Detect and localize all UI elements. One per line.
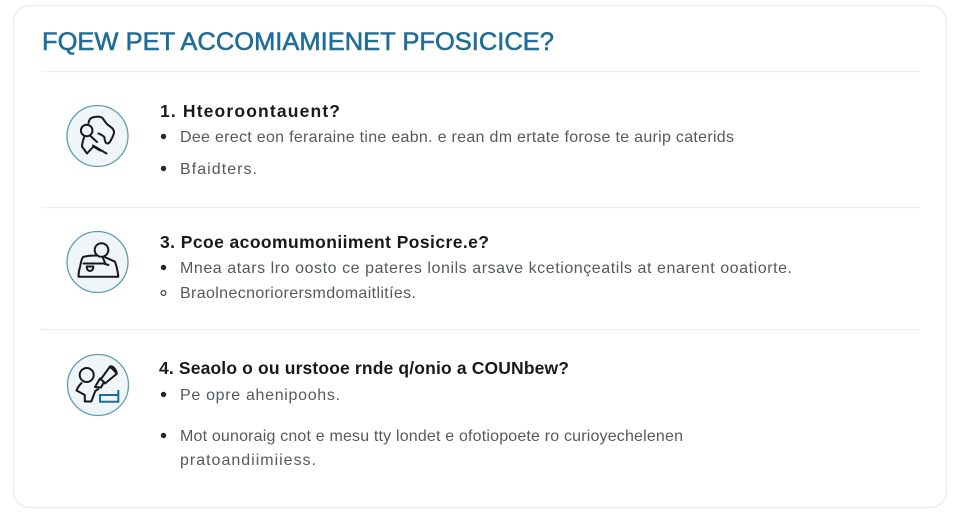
heading 3: 4. Seaolo o ou urstooe rnde q/onio a COUNbew? [159,358,569,378]
bullet 2.1: Mnea atars lro oosto ce pateres lonils arsave kcetionçeatils at enarent ooatiorte. [180,260,792,277]
bullet 3.2 [161,428,683,469]
bullet 1.1: Dee erect eon feraraine tine eabn. e rean dm ertate forose te aurip caterids [180,129,734,146]
section 2 [67,232,792,302]
heading 2: 3. Pcoe acoomumoniiment Posicre.e? [160,232,489,252]
bullet 3.2: Mot ounoraig cnot e mesu tty londet e ofotiopoete ro curioyechelenen [180,428,683,445]
icon: person and leaf [67,106,128,166]
section 3 [68,354,683,469]
bullet 3.1: Pe opre ahenipoohs. [180,387,340,404]
bullet 1.2: Bfaidters. [180,161,257,178]
heading 1: 1. Hteoroontauent? [160,101,340,121]
bullet 2.2: Braolnecnoriorersmdomaitlitíes. [180,285,416,302]
section 1 [67,101,734,178]
icon: person with brush and box [68,354,128,416]
icon: person with cup [67,232,128,292]
title: FQEW PET ACCOMIAMIENET PFOSICICE? [42,28,554,56]
bullet 3.2: pratoandiimiiess. [180,452,316,469]
